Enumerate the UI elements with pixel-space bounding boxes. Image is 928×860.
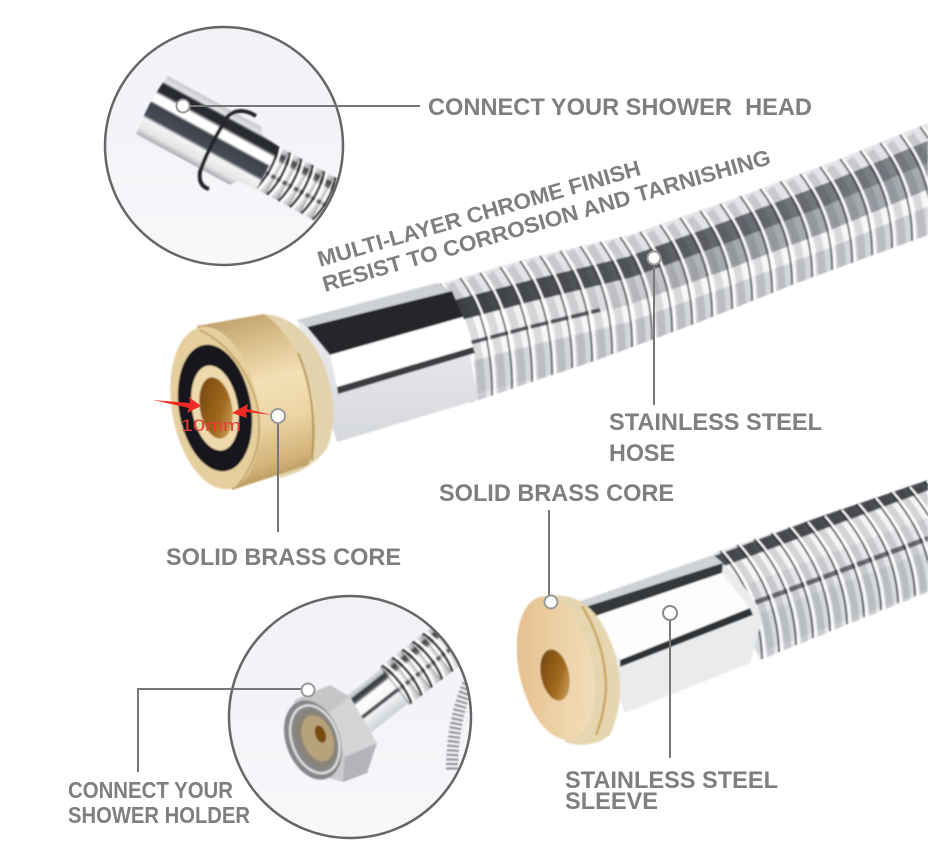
- chrome cylinder: [134, 75, 284, 197]
- circle inset: shower head connector: [105, 27, 373, 265]
- label: stainless steel hose: STAINLESS STEEL: [609, 409, 822, 436]
- threaded hose and neck tube: [348, 628, 458, 732]
- lower rib grooves: [720, 481, 928, 659]
- label: solid brass core (upper): [166, 409, 401, 571]
- label: solid brass core (upper): SOLID BRASS CORE: [166, 544, 401, 571]
- label: stainless steel sleeve: [565, 606, 778, 815]
- lower rib shadow layer: [729, 481, 928, 659]
- threaded opening: [283, 700, 342, 780]
- main hose assembly: [158, 110, 928, 496]
- brass core end: [158, 314, 333, 496]
- label: connect your shower head: CONNECT YOUR SHOWER HEAD: [428, 94, 812, 121]
- rib shadow layer: [450, 127, 928, 402]
- brass flange end: [505, 589, 620, 747]
- second hose assembly: [505, 470, 928, 747]
- stainless steel hose: [439, 123, 928, 403]
- label: solid brass core (lower): SOLID BRASS CORE: [439, 480, 674, 507]
- label: connect your shower holder: SHOWER HOLDER: [68, 802, 250, 828]
- rib highlight layer: [443, 127, 928, 402]
- label: multi-layer chrome finish: RESIST TO CORROSION AND TARNISHING: [319, 145, 773, 297]
- label: stainless steel sleeve: STAINLESS STEEL: [565, 767, 778, 794]
- rib dark grooves: [440, 127, 928, 402]
- threaded hose in inset: [256, 146, 338, 221]
- stainless steel sleeve: [578, 555, 762, 713]
- hex nut: [293, 700, 346, 782]
- label: stainless steel hose: [609, 252, 822, 467]
- label: solid brass core (lower): [439, 480, 674, 608]
- stainless steel hose, lower: [713, 479, 928, 660]
- label: stainless steel hose: HOSE: [609, 440, 675, 467]
- label: connect your shower head: [176, 94, 812, 121]
- dimension arrows: 10mm: [153, 397, 272, 435]
- circle inset: shower holder nut: [229, 596, 488, 838]
- label: connect your shower holder: CONNECT YOUR: [68, 777, 233, 803]
- label: multi-layer chrome finish: MULTI-LAYER CHROME FINISH: [314, 155, 643, 272]
- label: connect your shower holder: [68, 684, 314, 828]
- lower rib highlight layer: [723, 481, 928, 659]
- rubber o-ring: [200, 111, 256, 189]
- chrome sleeve: [297, 283, 477, 442]
- label: stainless steel sleeve: SLEEVE: [565, 788, 658, 815]
- dimension arrows: 10mm: 10mm: [181, 416, 241, 435]
- background coil: [452, 680, 470, 770]
